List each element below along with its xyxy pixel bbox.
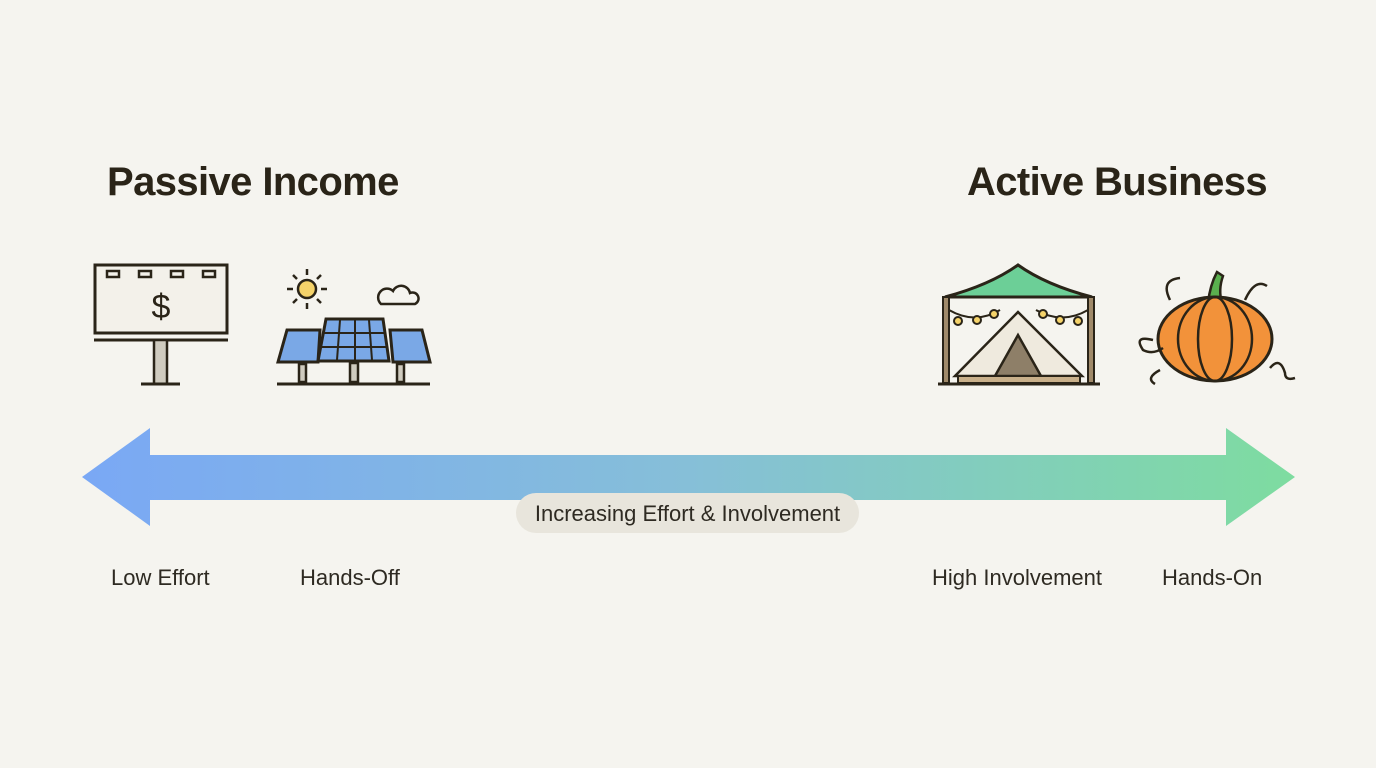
icon: billboard <box>94 264 228 386</box>
icon: billboard: $ <box>152 288 171 326</box>
label: high involvement: High Involvement <box>932 565 1102 590</box>
title: passive income: Passive Income <box>107 160 399 204</box>
arrow: effort spectrum <box>82 428 1295 526</box>
label: hands-on: Hands-On <box>1162 565 1262 590</box>
icon: glamping tent <box>938 263 1100 386</box>
label: low effort: Low Effort <box>111 565 210 590</box>
icon: solar panels <box>276 269 432 386</box>
icon: pumpkin <box>1138 270 1296 386</box>
label: hands-off: Hands-Off <box>300 565 400 590</box>
callout: increasing effort pill <box>516 493 859 533</box>
title: active business: Active Business <box>967 160 1267 204</box>
callout: increasing effort pill: Increasing Effort & Involvement <box>535 501 840 526</box>
